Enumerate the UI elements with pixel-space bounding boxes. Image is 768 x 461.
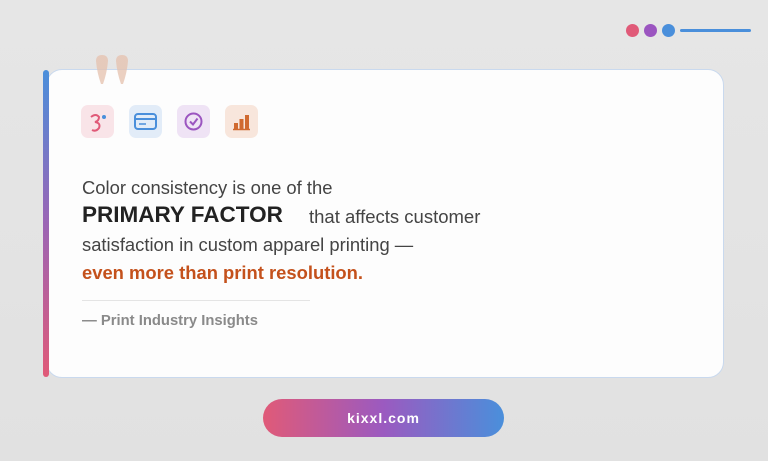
quote text: even more than print resolution.: [82, 262, 363, 283]
button: site: kixxl.com: [347, 410, 420, 426]
button: site: [263, 399, 504, 437]
accent bar: [43, 70, 49, 377]
icon: check: [177, 105, 210, 138]
card: [46, 69, 724, 378]
quote mark: [96, 55, 128, 84]
quote text: that affects customer: [309, 206, 480, 227]
icon: card: [129, 105, 162, 138]
icon: color: [81, 105, 114, 138]
quote text: PRIMARY FACTOR: [82, 202, 283, 227]
quote text: satisfaction in custom apparel printing —: [82, 234, 413, 255]
attribution: — Print Industry Insights: [82, 313, 258, 329]
decoration: top right dots: [626, 24, 751, 37]
icon: bars: [225, 105, 258, 138]
quote text: Color consistency is one of the: [82, 177, 332, 198]
quote text: [82, 177, 480, 283]
